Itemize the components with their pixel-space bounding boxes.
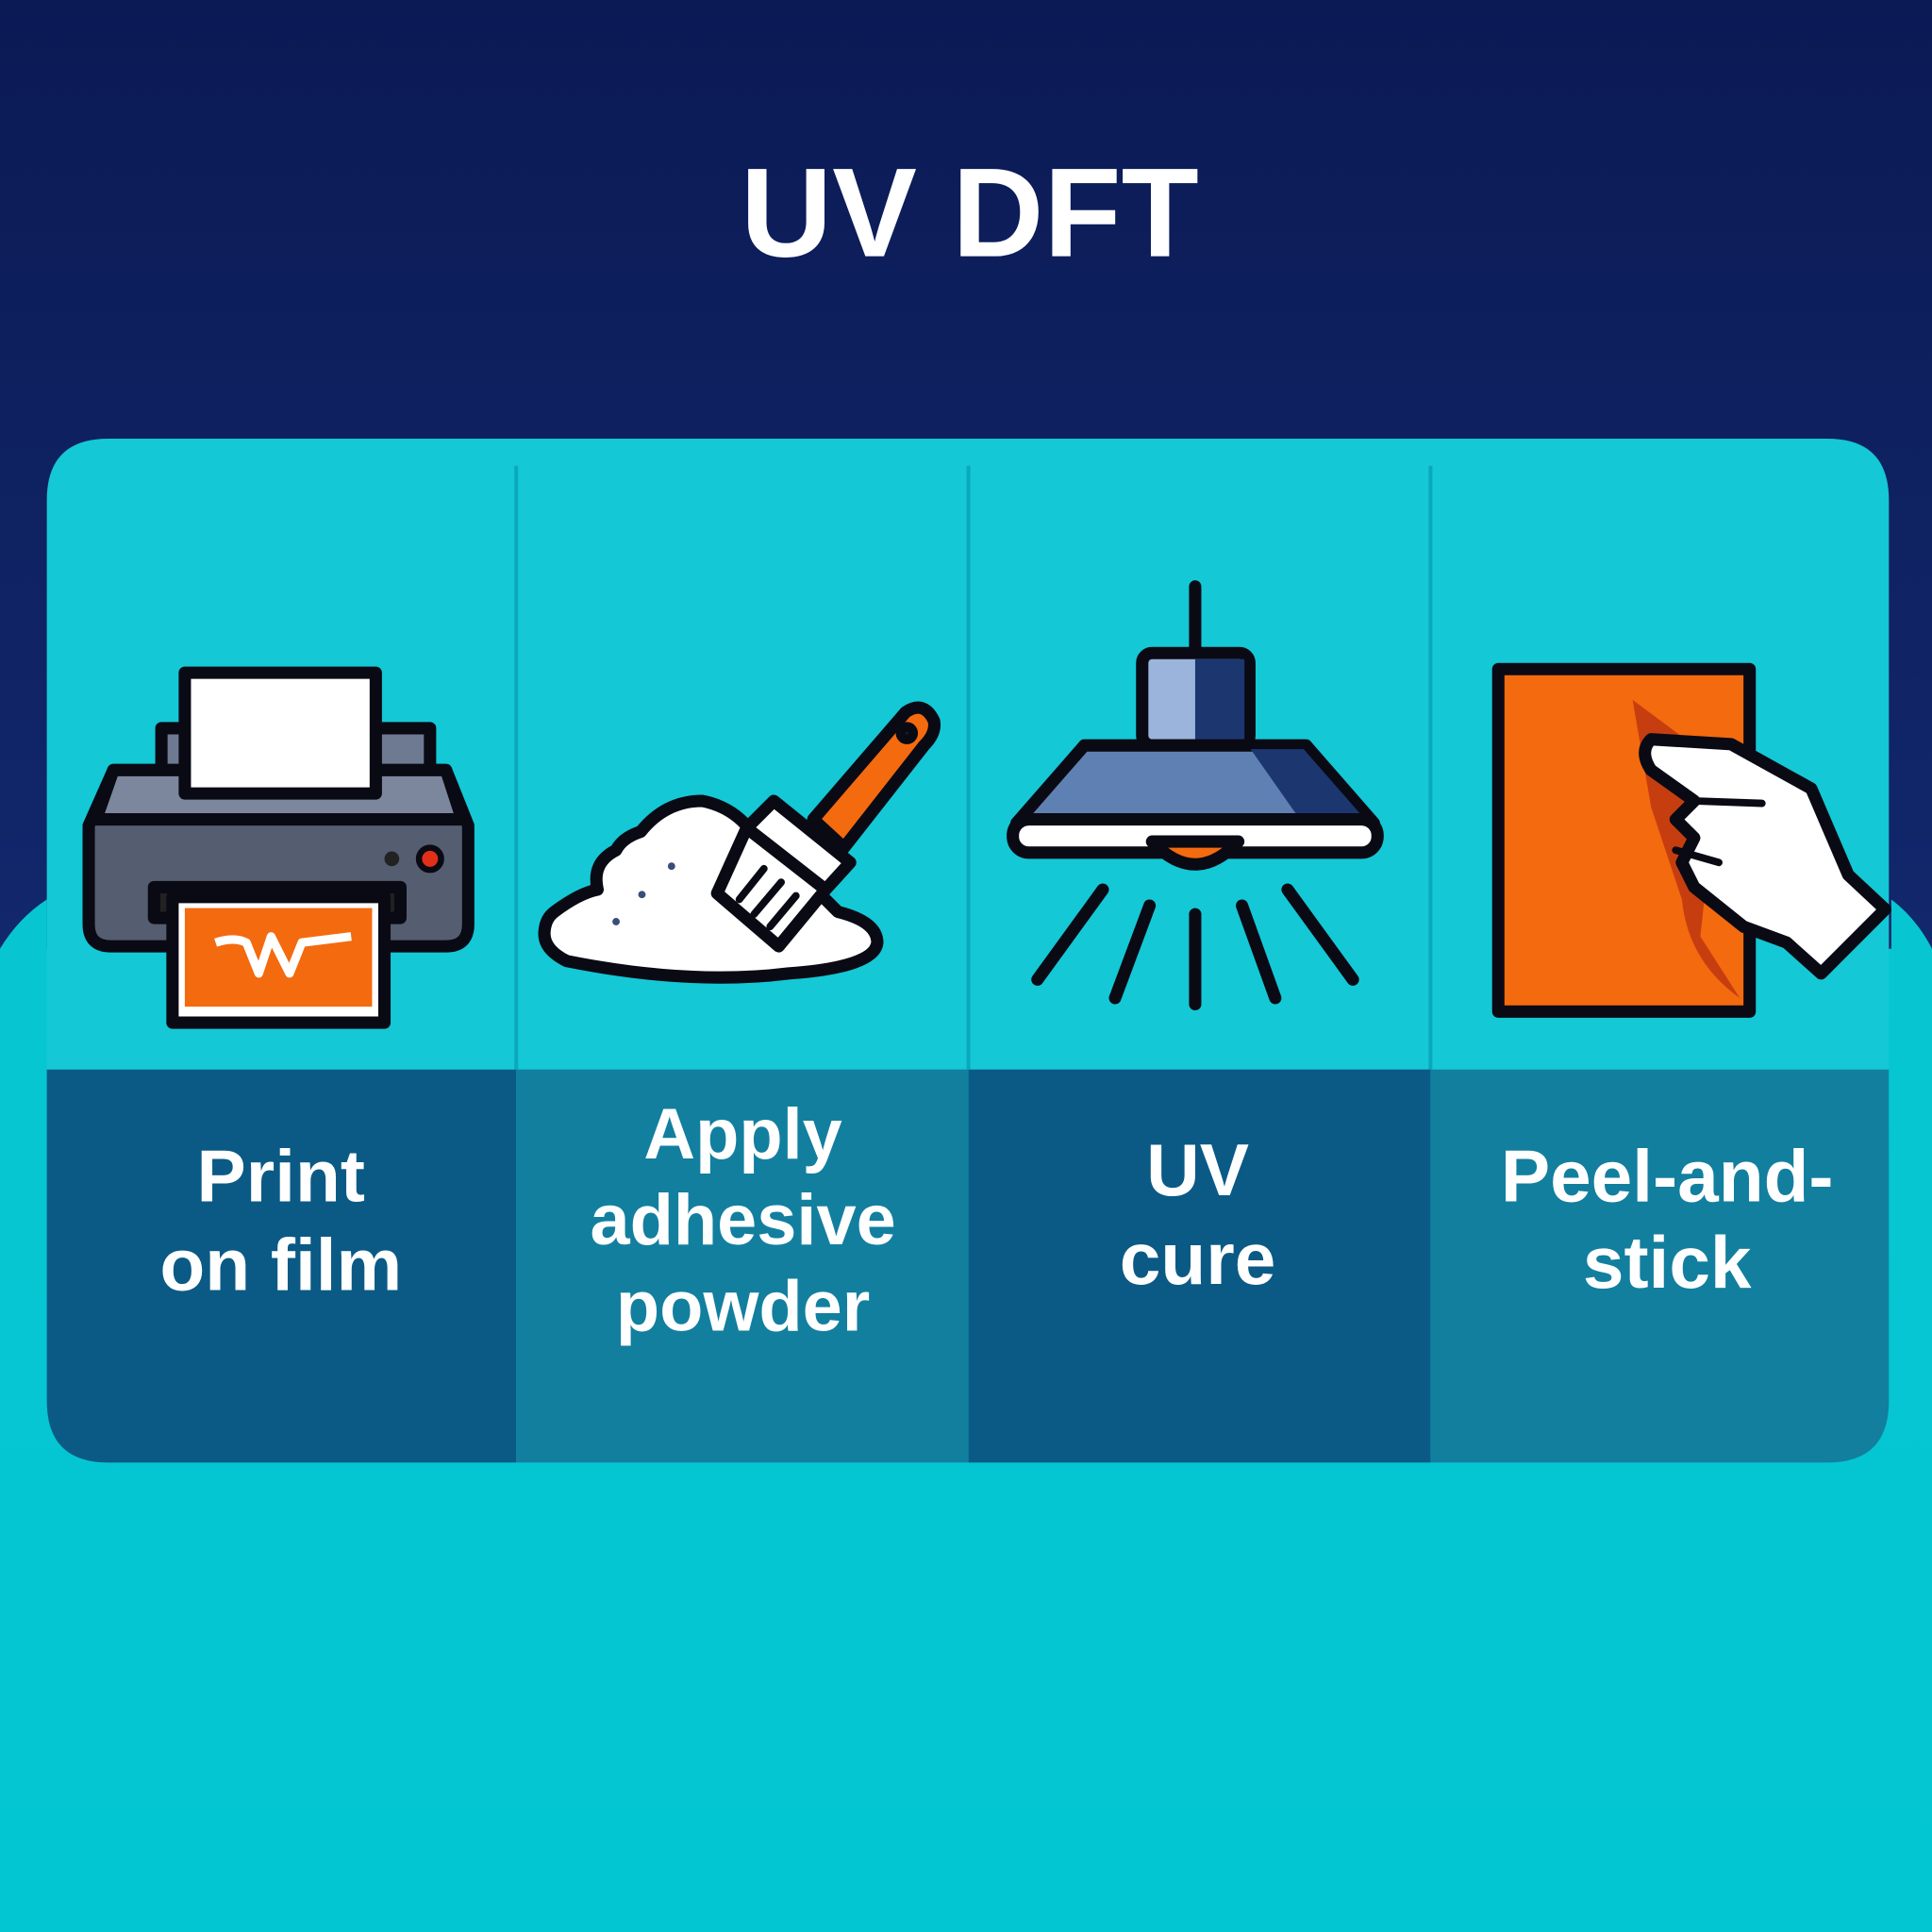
label: peel and stick: stick	[1583, 1221, 1752, 1304]
panel: process steps	[47, 439, 1889, 1462]
label: peel and stick: Peel-and-	[1501, 1134, 1834, 1217]
label: apply adhesive powder: powder	[616, 1267, 870, 1347]
title: UV DFT	[741, 142, 1199, 284]
label: apply adhesive powder: Apply	[643, 1094, 842, 1174]
label: UV cure: UV	[1146, 1128, 1249, 1211]
label: apply adhesive powder: adhesive	[590, 1180, 896, 1260]
label: print on film: on film	[159, 1224, 402, 1307]
icon: powder and brush	[544, 708, 934, 977]
label: print on film: Print	[197, 1134, 365, 1217]
icon: peel and stick sheet with hand	[1498, 669, 1885, 1011]
icon: printer	[89, 673, 468, 1023]
label: UV cure: cure	[1120, 1217, 1275, 1300]
icon: UV lamp	[1013, 587, 1377, 1004]
